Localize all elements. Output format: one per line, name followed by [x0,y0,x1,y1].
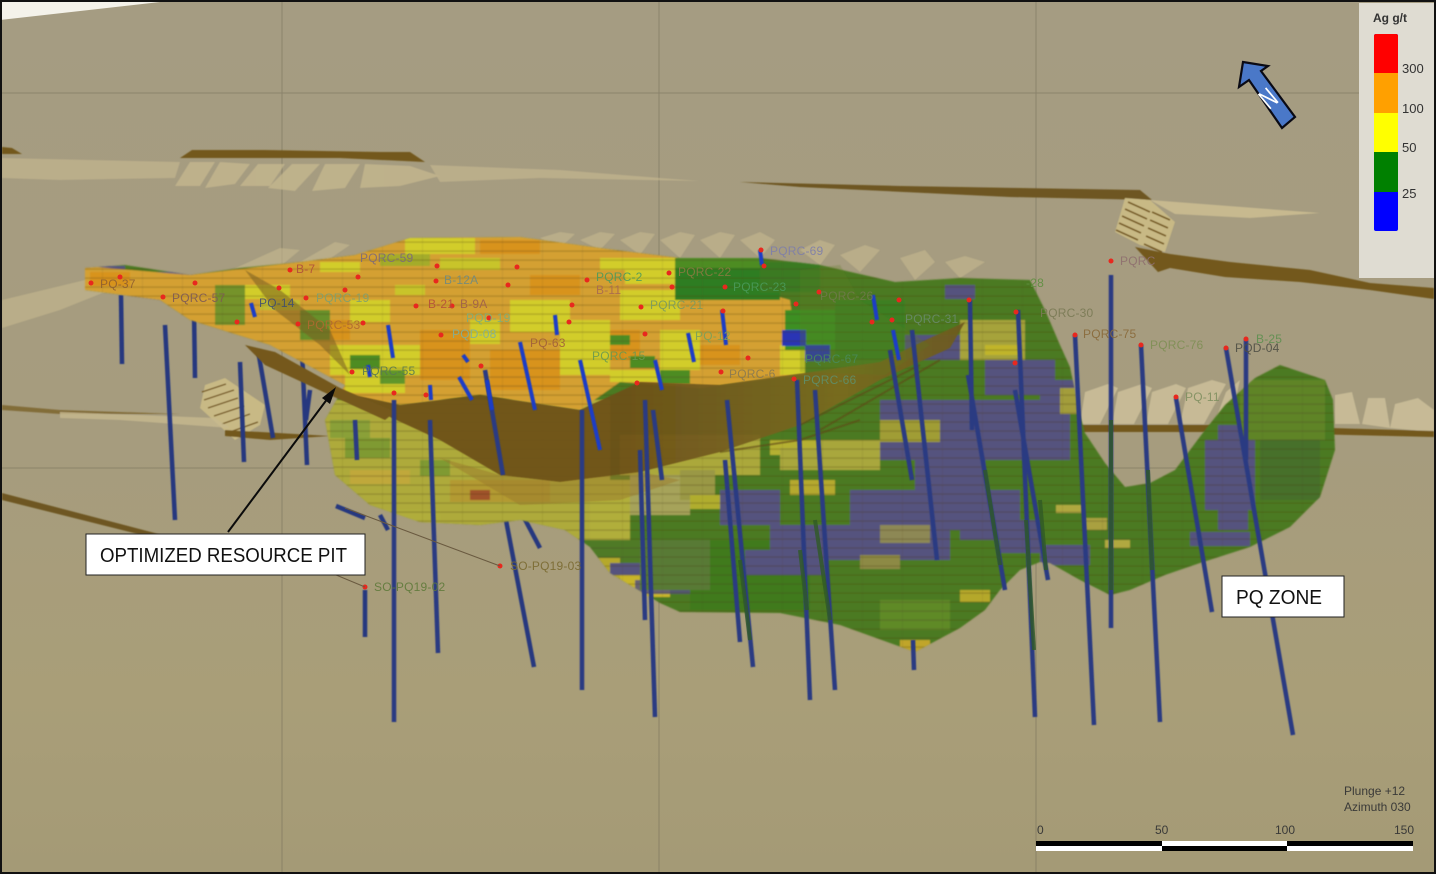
olive and yellow patches on the right [770,320,1325,652]
drill hole labels: PQ-14 [259,296,295,310]
strata texture [84,240,1334,648]
drill hole labels: PQRC-26 [820,289,874,303]
drill hole labels: SO-PQ19-02 [374,580,445,594]
legend: Ag g/t colour scale [1359,3,1434,278]
icon: north arrow: N [1253,82,1284,116]
legend values: 50 [1402,140,1416,155]
high-grade blue cells [782,330,830,361]
scale bar: 150 [1394,823,1414,837]
drill hole labels: PQRC-6 [729,367,776,381]
drill hole labels: PQRC-59 [360,251,414,265]
purple low-grade band [85,266,1255,575]
resource block model: PQ zone grade shell [84,236,1336,652]
legend values: 100 [1402,101,1424,116]
drill hole labels: SO-PQ19-03 [510,559,581,573]
drill hole labels: PQRC-21 [650,298,704,312]
drill hole labels: B-21 [428,297,454,311]
upper strip [2,158,700,191]
callout: PQ zone: PQ ZONE [1236,587,1322,609]
view orientation note: Plunge +12 [1344,784,1405,798]
drill hole labels: PQ-37 [100,277,136,291]
drill hole labels: PQRC-19 [316,291,370,305]
view orientation note [1344,784,1411,814]
drill hole labels: PQRC-75 [1083,327,1137,341]
lower-left low-grade lobe [320,400,810,610]
drill hole labels: PQRC [1120,254,1156,268]
drill hole labels: PQRC-53 [307,318,361,332]
drill holes behind the model [121,295,540,667]
drill hole labels: -28 [1026,276,1044,290]
lower-left strip [200,378,265,440]
drill hole labels: B-12A [444,273,478,287]
drill hole labels: B-9A [460,297,487,311]
drill hole labels: PQRC-22 [678,265,732,279]
drill hole segments tinted by the green shell [740,420,1152,650]
orange patches [90,240,740,390]
callout: optimized resource pit [86,534,365,575]
drill holes in front of the model [355,275,1293,735]
drill hole labels: PQRC-2 [596,270,643,284]
legend values: 300 [1402,61,1424,76]
drill hole labels: PQRC-76 [1150,338,1204,352]
drill hole labels: PQ-63 [530,336,566,350]
drill hole labels [100,244,1282,594]
drill hole labels: PQD-19 [466,311,511,325]
drill hole collar markers [88,248,1248,590]
scale bar: 0 [1037,823,1044,837]
drill hole labels: B-7 [296,262,315,276]
drill hole labels: PQRC-66 [803,373,857,387]
upper right strip [740,182,1152,200]
legend values: 25 [1402,186,1416,201]
drill hole labels: PQRC-67 [805,352,859,366]
legend values [1402,61,1424,201]
right strip teeth [1080,380,1434,432]
drill hole labels: PQ-12 [695,329,731,343]
optimized resource pit surface [245,265,965,505]
legend title: Ag g/t [1373,11,1407,25]
drill hole labels: PQD-08 [452,327,497,341]
drill hole intervals above the pit [251,250,899,450]
traces: off-section drill hole paths [300,508,500,587]
drill hole labels: B-25 [1256,332,1282,346]
drill hole labels: PQD-04 [1235,341,1280,355]
green patches [215,258,905,384]
callout: optimized resource pit: OPTIMIZED RESOURCE PIT [100,545,347,567]
drill hole labels: PQRC-69 [770,244,824,258]
scale bar [1036,823,1414,851]
terrain: surface strips behind the model [2,147,1434,537]
middle strip teeth [2,232,985,328]
callout: PQ zone [1222,576,1344,617]
legend colour bar [1374,34,1398,231]
drill hole labels: PQRC-31 [905,312,959,326]
upper high-grade domain [85,236,800,410]
drill hole labels: PQRC-23 [733,280,787,294]
drill hole labels: B-11 [596,283,621,297]
scale bar: 100 [1275,823,1295,837]
drill hole labels: PQ-11 [1185,390,1220,404]
drill hole labels: PQRC-15 [592,349,646,363]
view orientation note: Azimuth 030 [1344,800,1411,814]
drill hole labels: PQRC-57 [172,291,226,305]
callout arrow: pit [228,387,336,532]
yellow patches [240,238,805,393]
icon: north arrow [1239,62,1295,128]
scale bar: 50 [1155,823,1169,837]
drill hole labels: PQRC-30 [1040,306,1094,320]
drill hole labels: PQRC-55 [362,364,416,378]
